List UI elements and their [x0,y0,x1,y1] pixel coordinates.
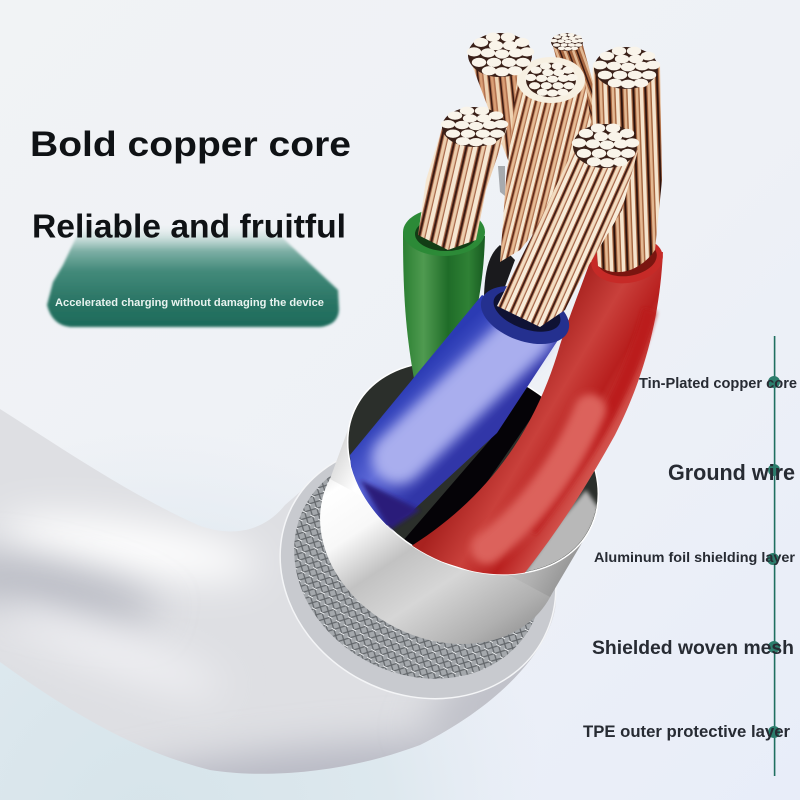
label column [583,336,797,776]
copper bundle: back right [590,65,662,272]
label: aluminum foil shielding layer: Aluminum foil shielding layer [594,549,796,565]
grey inner wire [498,166,505,196]
heading: reliable and fruitful: Reliable and fruitful [32,208,346,244]
label: tpe outer protective layer: TPE outer protective layer [583,722,790,741]
copper bundle: back left [472,57,532,161]
label: shielded woven mesh: Shielded woven mesh [592,637,794,659]
woven mesh shielding [254,411,582,721]
strand ends: center bundle [517,57,585,103]
label: tin-plated copper core: Tin-Plated copper core [639,375,797,392]
vertical leader line [774,336,775,776]
strand ends: left [441,107,508,147]
wires [350,42,666,585]
strand ends: front [572,124,639,168]
heading: bold copper core: Bold copper core [30,124,351,164]
black wire [484,245,515,300]
strand ends: back small [550,33,584,51]
strand ends: back left [467,33,534,77]
marker dots [767,376,780,738]
panel caption: Accelerated charging without damaging the device [55,297,324,309]
metal collar ring [235,398,601,746]
cable opening [347,364,599,576]
strand ends: back right [593,47,660,89]
copper bundle: back small [553,44,593,126]
blue wire [350,275,577,530]
green panel [47,225,339,327]
cable body [0,409,556,774]
copper bundle: left [418,128,507,250]
copper bundle: center [500,80,592,262]
aluminum foil cylinder [283,391,597,685]
copper bundle: front [497,150,638,327]
green wire [403,212,485,378]
red wire [405,232,666,585]
label: ground wire: Ground wire [668,460,795,485]
